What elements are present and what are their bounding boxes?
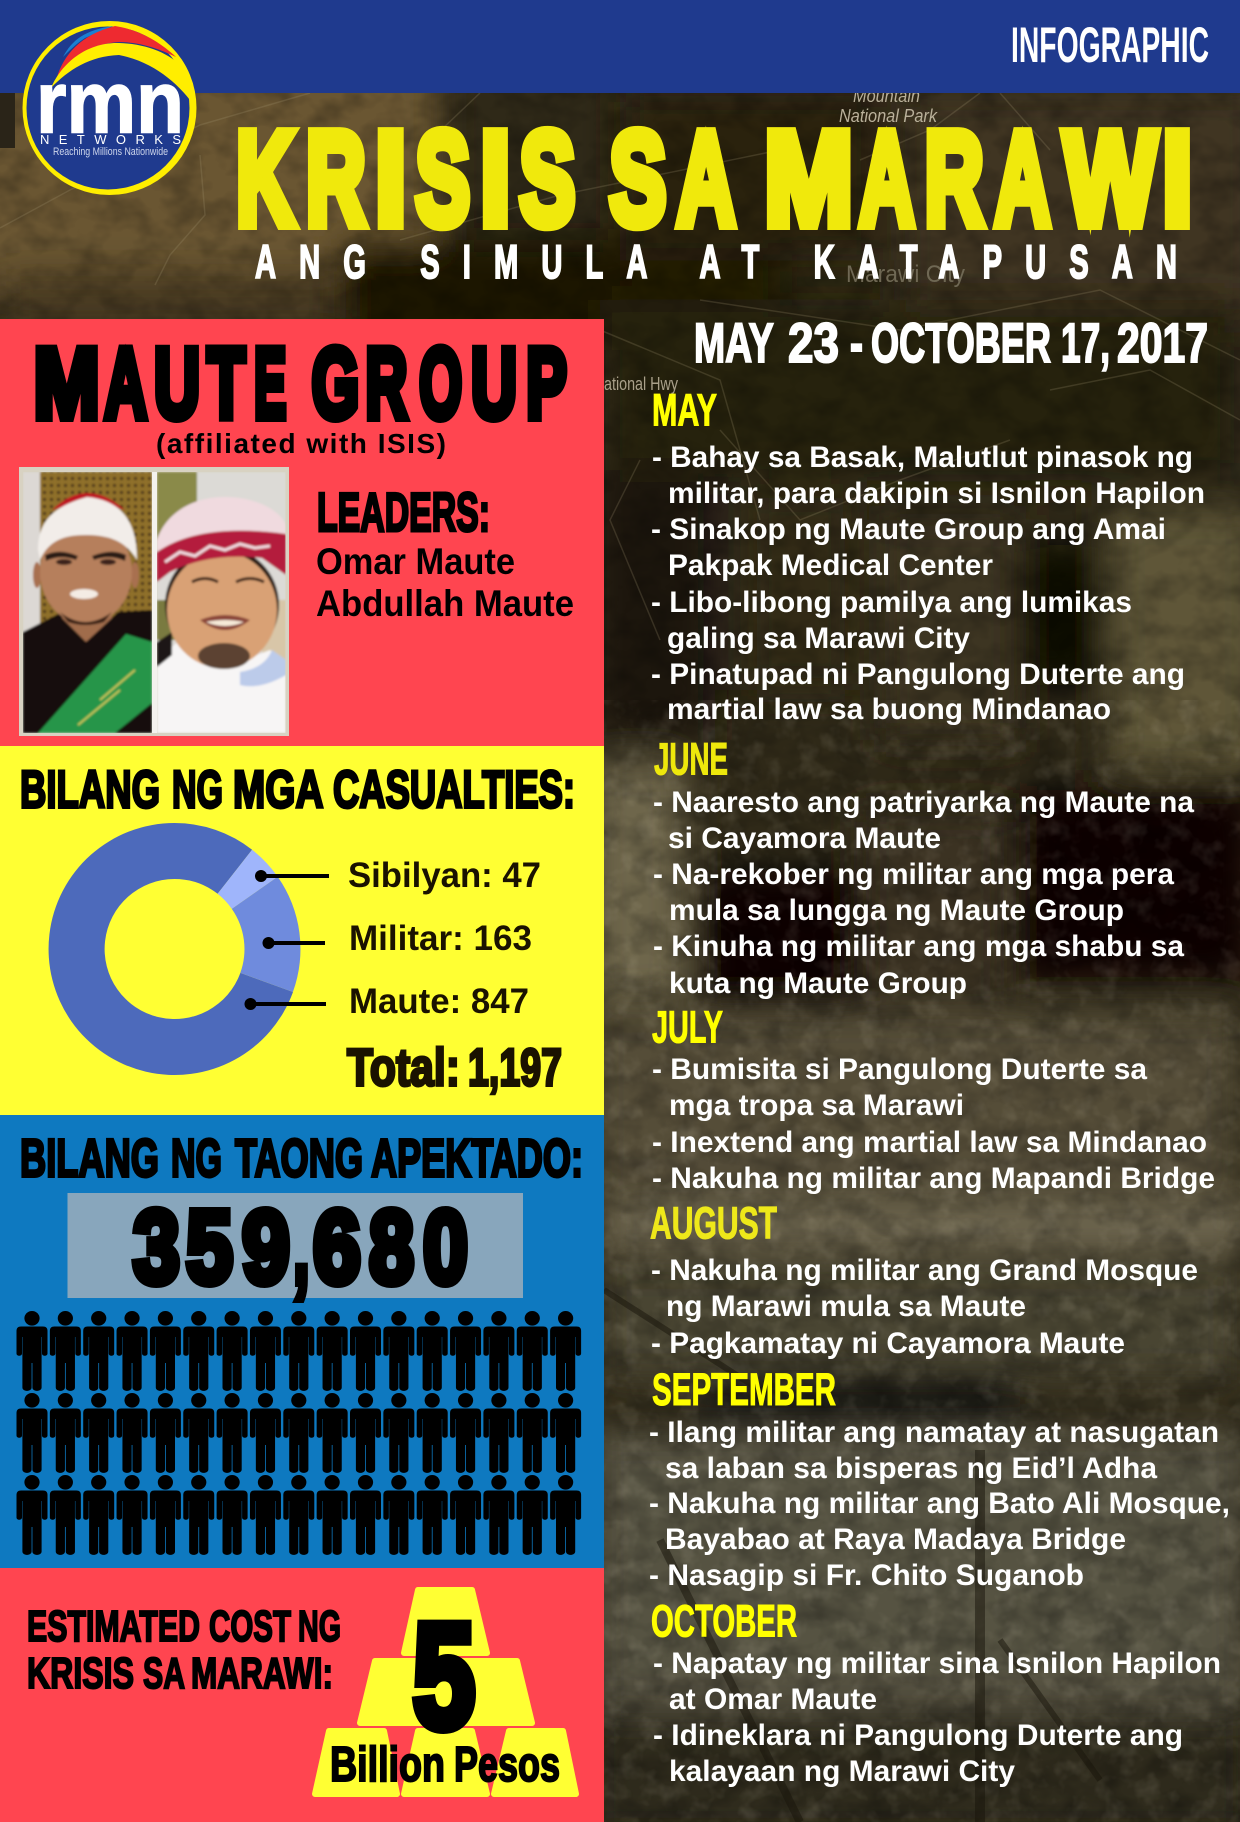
timeline: July: JULY [652, 1002, 723, 1052]
callout line: Sibilyan [255, 870, 329, 882]
label: Militar: Militar: 163 [349, 919, 532, 958]
title: R [925, 105, 984, 252]
portrait: Omar Maute [23, 472, 152, 733]
heading: Maute Group: U [471, 328, 517, 438]
timeline: May [651, 384, 1205, 726]
timeline: August [650, 1198, 1198, 1360]
number box: 3 [133, 1190, 180, 1304]
donut chart [49, 823, 300, 1075]
timeline: June: si Cayamora Maute [668, 822, 941, 855]
panel: estimated cost [0, 1568, 604, 1822]
panel: casualties [0, 746, 604, 1115]
heading: Maute Group: A [104, 328, 147, 438]
title: I [375, 105, 406, 252]
title: S [520, 105, 575, 252]
timeline: June: kuta ng Maute Group [669, 967, 967, 1000]
leader name: Abdullah Maute: Abdullah Maute [316, 583, 574, 624]
number box: 8 [369, 1190, 414, 1304]
timeline: July: - Bumisita si Pangulong Duterte sa [652, 1053, 1147, 1086]
timeline: October: - Napatay ng militar sina Isnilon Hapilon [653, 1647, 1221, 1680]
timeline: July: - Inextend ang martial law sa Mindanao [652, 1126, 1207, 1159]
number box: 0 [423, 1190, 468, 1304]
timeline: June: mula sa lungga ng Maute Group [669, 894, 1124, 927]
header bar [0, 0, 1240, 93]
logo: RMN Networks: rmn [36, 52, 184, 152]
number box: 6 [313, 1190, 361, 1304]
heading: casualties: CASUALTIES: [333, 760, 575, 820]
timeline: June: - Naaresto ang patriyarka ng Maute na [653, 786, 1194, 819]
heading: Maute Group: T [207, 328, 245, 438]
number box: 5 [186, 1190, 233, 1304]
date range: 2017 [1117, 311, 1208, 374]
timeline: June: - Na-rekober ng militar ang mga pera [653, 858, 1174, 891]
label: Maute: Maute: 847 [349, 982, 529, 1021]
heading: estimated cost: KRISIS [27, 1649, 134, 1698]
timeline: August: - Nakuha ng militar ang Grand Mosque [651, 1254, 1198, 1287]
heading: affected people: APEKTADO: [371, 1128, 583, 1188]
timeline: October [651, 1596, 1221, 1788]
title: A [860, 105, 914, 252]
decorative building lines [604, 1290, 1100, 1822]
number five: 5 [413, 1594, 475, 1759]
timeline: September: - Nakuha ng militar ang Bato Ali Mosque, [649, 1487, 1230, 1520]
subtitle: ANG SIMULA AT KATAPUSAN [255, 237, 1177, 289]
date range: 23 [788, 311, 839, 374]
map label: Mountain National Park: Mountain [853, 86, 920, 106]
callout line: Militar [262, 937, 325, 949]
title: A [677, 105, 733, 252]
timeline: May: - Pinatupad ni Pangulong Duterte ang [651, 658, 1185, 691]
timeline: July: mga tropa sa Marawi [669, 1089, 964, 1122]
timeline: May: MAY [652, 384, 717, 436]
timeline: May: - Libo-libong pamilya ang lumikas [651, 586, 1132, 619]
timeline: October: OCTOBER [651, 1596, 797, 1646]
label: billion pesos: Pesos [454, 1738, 560, 1792]
heading: Maute Group: M [34, 328, 100, 438]
timeline: July [652, 1002, 1215, 1195]
timeline: October: kalayaan ng Marawi City [669, 1755, 1015, 1788]
timeline: July: - Nakuha ng militar ang Mapandi Bridge [652, 1162, 1215, 1195]
title: A [995, 105, 1050, 252]
heading: estimated cost: ESTIMATED [27, 1602, 200, 1651]
date range: 17, [1061, 311, 1110, 374]
heading: casualties: NG [172, 760, 223, 820]
total: Total: [347, 1038, 460, 1098]
map label: Mountain National Park [839, 86, 938, 126]
timeline: June: - Kinuha ng militar ang mga shabu sa [653, 930, 1184, 963]
leaders heading: LEADERS: [317, 481, 490, 543]
map label: Marawi City: Marawi City [846, 261, 965, 288]
panel: Maute group [0, 319, 604, 746]
heading: affected people: TAONG [235, 1128, 363, 1188]
label: Sibilyan: Sibilyan: 47 [348, 856, 541, 895]
date range: MAY [694, 311, 773, 374]
leader name: Omar Maute: Omar Maute [316, 541, 515, 582]
subheading: affiliated with ISIS: (affiliated with ISIS) [156, 428, 446, 459]
title: I [1162, 105, 1192, 252]
title: W [1064, 105, 1157, 252]
label: billion pesos: Billion [330, 1738, 445, 1792]
heading: Maute Group: O [419, 328, 462, 438]
timeline: September: Bayabao at Raya Madaya Bridge [665, 1523, 1126, 1556]
heading: estimated cost: MARAWI: [191, 1649, 333, 1698]
timeline: September: sa laban sa bisperas ng Eid’l Adha [665, 1452, 1157, 1485]
map label: National Hwy: ational Hwy [604, 374, 678, 394]
logo: RMN Networks [22, 21, 196, 195]
heading: estimated cost: SA [143, 1649, 185, 1698]
heading: estimated cost: NG [298, 1602, 341, 1651]
decorative map roads [0, 93, 1240, 640]
timeline: October: - Idineklara ni Pangulong Duterte ang [653, 1719, 1183, 1752]
timeline: September: SEPTEMBER [652, 1364, 836, 1415]
timeline: May: - Bahay sa Basak, Malutlut pinasok ng [652, 441, 1193, 474]
logo: RMN Networks: Reaching Millions Nationwide [53, 146, 168, 158]
timeline: August: - Pagkamatay ni Cayamora Maute [651, 1327, 1125, 1360]
heading: affected people: BILANG [20, 1128, 159, 1188]
heading: affected people: NG [171, 1128, 222, 1188]
title: S [610, 105, 666, 252]
timeline: September [649, 1364, 1230, 1592]
heading: Maute Group: U [154, 328, 200, 438]
timeline: August: ng Marawi mula sa Maute [666, 1290, 1026, 1323]
logo: RMN Networks: NETWORKS [40, 132, 181, 147]
timeline: June: JUNE [654, 734, 728, 784]
timeline: May: galing sa Marawi City [667, 622, 970, 655]
date range: OCTOBER [871, 311, 1051, 374]
map label: Mountain National Park: National Park [839, 106, 938, 126]
title: M [765, 105, 853, 252]
number box: , [294, 1190, 309, 1304]
people icons [16, 1311, 581, 1555]
heading: Maute Group: G [312, 328, 359, 438]
heading: casualties: MGA [233, 760, 323, 820]
timeline: September: - Ilang militar ang namatay at nasugatan [649, 1416, 1219, 1449]
callout line: Maute [244, 998, 326, 1010]
title: S [416, 105, 470, 252]
heading: Maute Group: E [254, 328, 286, 438]
title: K [236, 105, 294, 252]
timeline: October: at Omar Maute [669, 1683, 877, 1716]
timeline: May: Pakpak Medical Center [668, 549, 993, 582]
date range: - [850, 311, 863, 374]
photo: Maute brothers [19, 467, 289, 736]
icon: gold bars [315, 1590, 576, 1794]
timeline: May: militar, para dakipin si Isnilon Hapilon [668, 477, 1205, 510]
title: I [480, 105, 510, 252]
timeline: August: AUGUST [650, 1198, 777, 1248]
heading: Maute Group: R [366, 328, 407, 438]
heading: estimated cost: COST [209, 1602, 291, 1651]
heading: casualties: BILANG [20, 760, 160, 820]
timeline: June [653, 734, 1194, 1000]
heading: Maute Group: P [526, 328, 567, 438]
panel: affected people [0, 1115, 604, 1568]
timeline: September: - Nasagip si Fr. Chito Suganob [649, 1559, 1084, 1592]
timeline: May: martial law sa buong Mindanao [667, 693, 1111, 726]
title: R [306, 105, 366, 252]
number box: 9 [242, 1190, 290, 1304]
number box [68, 1190, 523, 1304]
total: 1,197 [468, 1038, 562, 1098]
portrait: Abdullah Maute [157, 472, 286, 733]
heading: estimated cost [27, 1602, 341, 1698]
timeline: May: - Sinakop ng Maute Group ang Amai [651, 513, 1166, 546]
